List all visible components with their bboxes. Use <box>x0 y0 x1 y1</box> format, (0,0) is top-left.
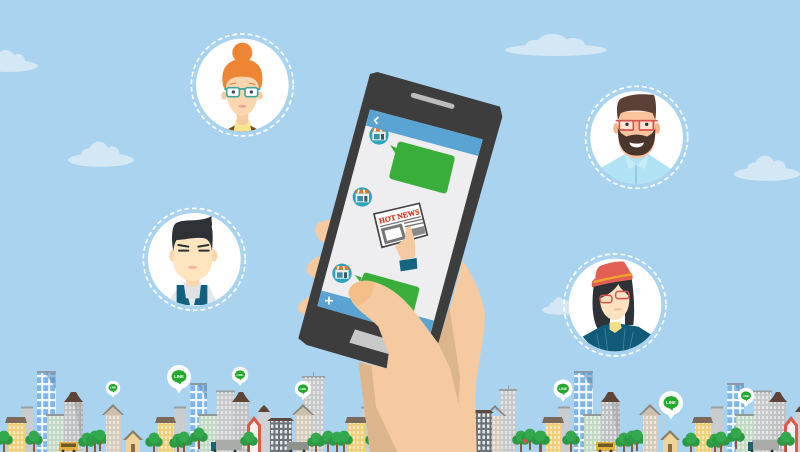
phone screen <box>317 109 483 338</box>
clouds <box>0 34 800 315</box>
phone footer bar <box>317 291 434 338</box>
plus sign <box>325 297 333 305</box>
hand shadows <box>358 307 460 452</box>
hot news newspaper with hand <box>374 203 427 271</box>
city skyline <box>0 371 800 452</box>
hot news newspaper with hand: HOT NEWS <box>378 207 420 226</box>
phone speaker <box>413 95 452 106</box>
shop avatar: bottom <box>332 264 352 283</box>
thumbnail <box>349 281 374 306</box>
phone header bar <box>366 109 483 156</box>
avatar: woman with orange hair bun <box>191 34 293 136</box>
avatar: bearded man with red glasses <box>586 86 688 188</box>
avatar: man with dark hair and vest <box>143 208 245 312</box>
mid city buildings right of the hand <box>465 385 549 452</box>
shop avatar: middle <box>353 187 372 207</box>
back arrow <box>375 117 378 124</box>
phone body <box>298 72 502 370</box>
thumb and hand front <box>348 281 477 452</box>
phone held in hand <box>298 72 502 452</box>
hand: fingers and palm behind phone <box>298 218 485 397</box>
shop avatar: top <box>369 125 389 145</box>
avatar: woman with red hat <box>564 254 666 356</box>
LINE pins <box>106 365 754 419</box>
green message bubble <box>390 145 451 190</box>
phone home button <box>349 329 390 354</box>
green message bubble: bottom <box>355 275 417 313</box>
